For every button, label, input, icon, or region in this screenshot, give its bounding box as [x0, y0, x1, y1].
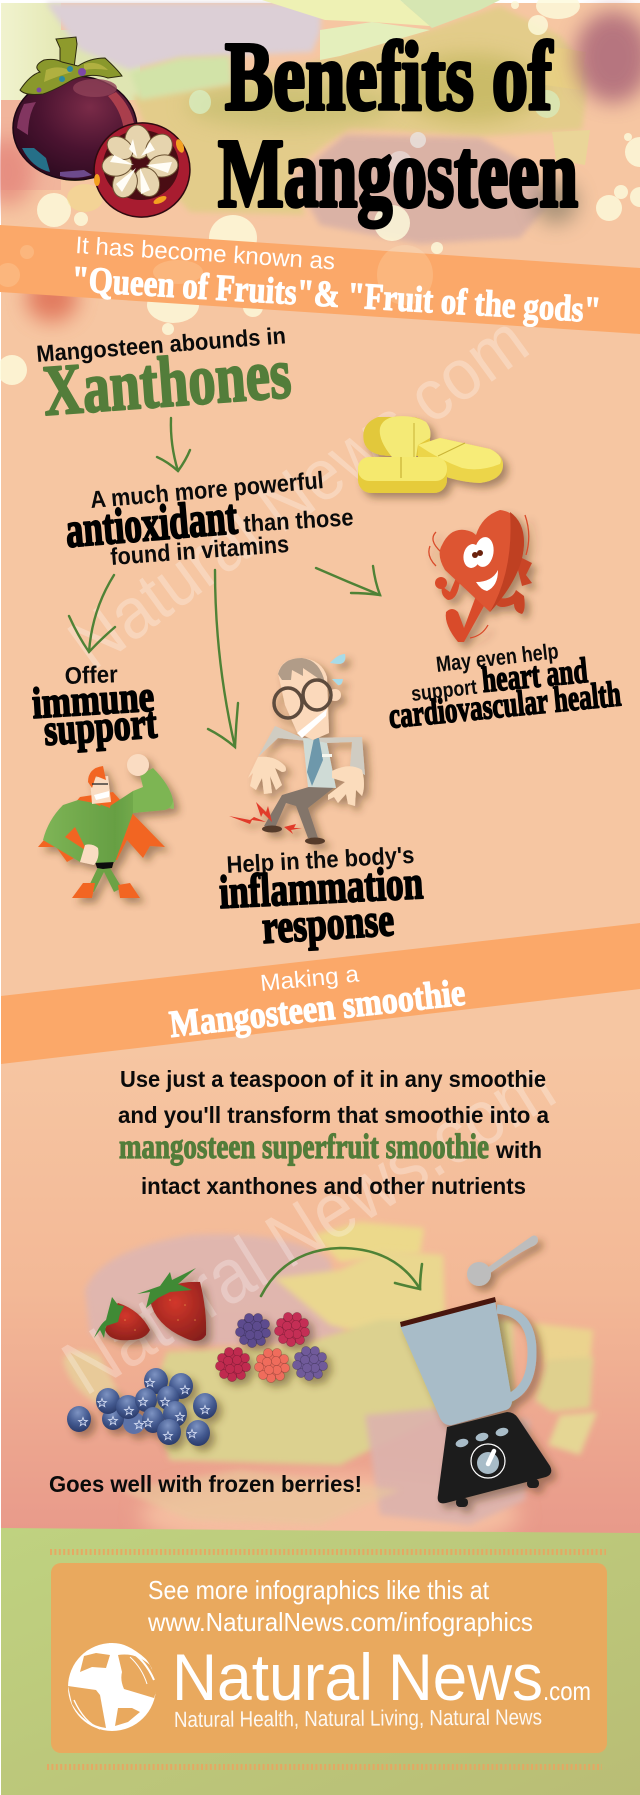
arrow: to heart: [316, 566, 380, 595]
text: inflammation: response: [260, 894, 395, 954]
text: antioxidant: A much more powerful: [89, 467, 325, 514]
text: heart health: support: [410, 676, 478, 706]
icon: blueberries: [67, 1368, 217, 1446]
icon: running heart: [429, 510, 532, 642]
collar, neck and head: [80, 792, 113, 808]
making a: Making a: [259, 960, 360, 996]
icon: vitamin pills: [358, 416, 503, 493]
front pill: [358, 457, 447, 493]
icon: mangosteen fruits: [13, 37, 201, 228]
text: inflammation: Help in the body's: [226, 842, 415, 879]
bottom-left quadrant: [68, 1686, 106, 1728]
natural news wordmark: News: [388, 1640, 543, 1714]
icon: strawberries: [94, 1268, 206, 1341]
text: antioxidant: than those: [243, 504, 354, 538]
cape: [38, 792, 165, 862]
text: immune support: Offer: [64, 661, 118, 690]
leaves: [80, 1653, 110, 1672]
icon: spoon: [467, 1236, 538, 1286]
heart body: [440, 510, 524, 612]
dotted rule top: [50, 1549, 606, 1555]
icon: blender: [400, 1297, 551, 1507]
back pill: [363, 417, 430, 456]
pain bolts: [229, 802, 302, 834]
buttons: [455, 1437, 469, 1449]
text: smoothie instructions: intact xanthones and other nutrients: [141, 1173, 526, 1199]
known-as line: It has become known as: [75, 232, 336, 275]
text: immune support: [31, 661, 159, 755]
icon: man in pain: [229, 654, 365, 844]
dotted rule bottom: [47, 1764, 602, 1770]
text: smoothie instructions: Use just a teaspoon of it in any smoothie: [120, 1066, 546, 1092]
text: smoothie instructions: [118, 1066, 550, 1199]
banner: known as: [0, 225, 640, 334]
cut half fruit: [83, 112, 201, 228]
icon: raspberries: [215, 1312, 328, 1383]
mangosteen smoothie: Mangosteen smoothie: [167, 972, 467, 1046]
base: [438, 1412, 551, 1503]
natural news wordmark: Natural: [172, 1640, 373, 1714]
whole fruit: [13, 37, 137, 181]
footer panel: [1, 1528, 640, 1795]
text: smoothie instructions: and you'll transform that smoothie into a: [118, 1102, 550, 1128]
title: [218, 23, 578, 227]
text: immune support: immune: [31, 672, 155, 728]
text: antioxidant: antioxidant: [63, 488, 240, 558]
tagline: Natural Health, Natural Living, Natural News: [174, 1704, 542, 1732]
natural news wordmark: [172, 1640, 543, 1714]
orange call-to-action card: [51, 1563, 607, 1753]
arrow: to immune support: [69, 575, 115, 652]
text: immune support: support: [42, 698, 159, 755]
jar handle: [497, 1309, 532, 1398]
text: xanthones: Xanthones: [40, 333, 294, 431]
arrow: to inflammation: [208, 570, 238, 747]
text: heart health: heart and: [480, 650, 589, 700]
arrow: berries to blender: [261, 1248, 422, 1296]
sweat drops: [330, 654, 345, 664]
text: smoothie instructions: mangosteen superfruit smoothie: [119, 1127, 489, 1166]
watermark lower: Natural News.com: [47, 1040, 569, 1411]
dial: [471, 1444, 505, 1478]
decorative paint behind smoothie: [63, 1222, 597, 1555]
top-right quadrant: [118, 1654, 155, 1698]
text: antioxidant: found in vitamins: [109, 531, 290, 571]
dot com: .com: [543, 1676, 591, 1706]
arrow: xanthones to antioxidant: [157, 418, 190, 471]
shirt: [258, 726, 365, 775]
banner: making a smoothie: [1, 923, 640, 1064]
neck and head: [278, 658, 329, 740]
right pill: [418, 438, 503, 483]
text: heart health: May even help: [435, 638, 560, 677]
torso and arms: [43, 791, 174, 863]
text: smoothie instructions: with: [495, 1137, 542, 1163]
text: frozen berries note: Goes well with frozen berries!: [49, 1471, 362, 1497]
limbs: [446, 596, 484, 642]
icon: globe logo: [68, 1640, 160, 1731]
jar: [400, 1301, 512, 1425]
decorative paint and bokeh at top: [0, 0, 640, 385]
see more line: See more infographics like this at: [148, 1575, 490, 1605]
text: inflammation: [218, 842, 424, 954]
text: antioxidant: [63, 467, 354, 571]
text: inflammation: inflammation: [218, 857, 424, 919]
motion lines: [429, 515, 529, 638]
pants: [264, 786, 336, 838]
url line: www.NaturalNews.com/infographics: [147, 1607, 533, 1637]
face: [462, 543, 482, 569]
icon: superhero: [38, 754, 174, 898]
watermark upper: Natural News.com: [54, 300, 542, 685]
hands: [248, 757, 286, 794]
text: xanthones: Mangosteen abounds in: [35, 322, 287, 367]
legs and boots: [87, 867, 122, 892]
